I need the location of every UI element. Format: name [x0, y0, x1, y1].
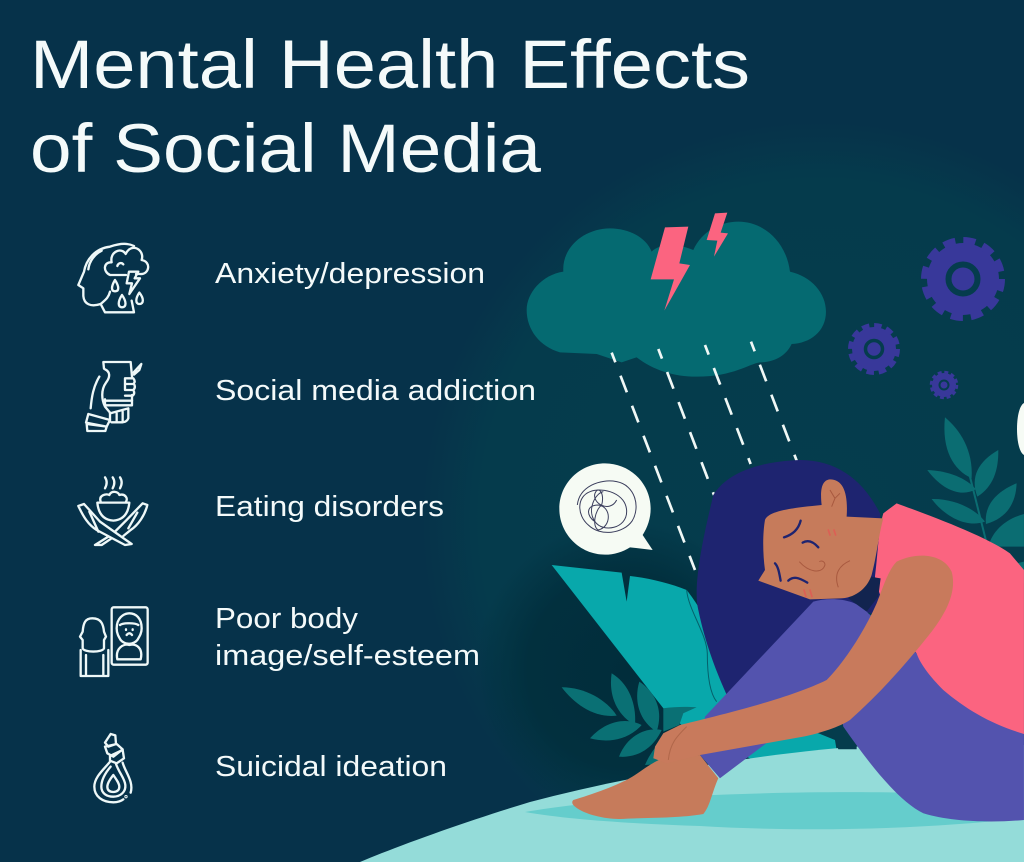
- dark gap behind legs: [832, 717, 857, 749]
- neck and face: [758, 479, 883, 599]
- gear small: [931, 372, 957, 398]
- plant left: [562, 673, 697, 765]
- icon: crossed hands with food bowl: [78, 477, 147, 545]
- shirt: [875, 503, 1024, 734]
- woman sitting: [572, 460, 1024, 821]
- legs: [700, 599, 1024, 821]
- label: suicidal ideation: Suicidal ideation: [215, 751, 447, 783]
- storm cloud with lightning: [527, 213, 826, 377]
- title: of Social Media: [30, 110, 542, 187]
- cloud body: [527, 222, 826, 377]
- thought bubble with scribble: [559, 463, 653, 555]
- icon: person in mirror: [80, 607, 148, 676]
- lightning small: [707, 213, 728, 257]
- floor: [360, 745, 1024, 862]
- icon: head with storm cloud: [78, 244, 148, 312]
- pillow seam: [687, 590, 717, 702]
- label: poor body image/self-esteem: Poor body: [215, 603, 359, 635]
- icon: noose: [94, 734, 131, 802]
- lightning large: [651, 227, 690, 311]
- label: social media addiction: Social media addiction: [215, 375, 536, 407]
- hair: [697, 460, 883, 698]
- plant right: [927, 417, 1024, 583]
- list of effects: [215, 258, 536, 783]
- pillow: [552, 565, 837, 760]
- label: poor body image/self-esteem: image/self-esteem: [215, 640, 480, 672]
- gear medium: [850, 326, 898, 372]
- foot: [572, 755, 718, 819]
- scribble: [577, 481, 636, 532]
- title: [30, 26, 750, 187]
- gear large: [925, 241, 1001, 317]
- arm and hand: [653, 556, 953, 763]
- label: eating disorders: Eating disorders: [215, 491, 444, 523]
- collar shadow: [848, 577, 881, 612]
- face features: [775, 521, 818, 583]
- icon: hand holding phone: [86, 362, 141, 431]
- gears: [850, 241, 1001, 398]
- label: anxiety/depression: Anxiety/depression: [215, 258, 485, 290]
- rain dashes: [612, 342, 797, 570]
- title: Mental Health Effects: [30, 26, 750, 103]
- label: poor body image/self-esteem: [215, 603, 480, 672]
- floor shadow: [525, 792, 1024, 829]
- white partial circle at right edge: [1017, 403, 1024, 455]
